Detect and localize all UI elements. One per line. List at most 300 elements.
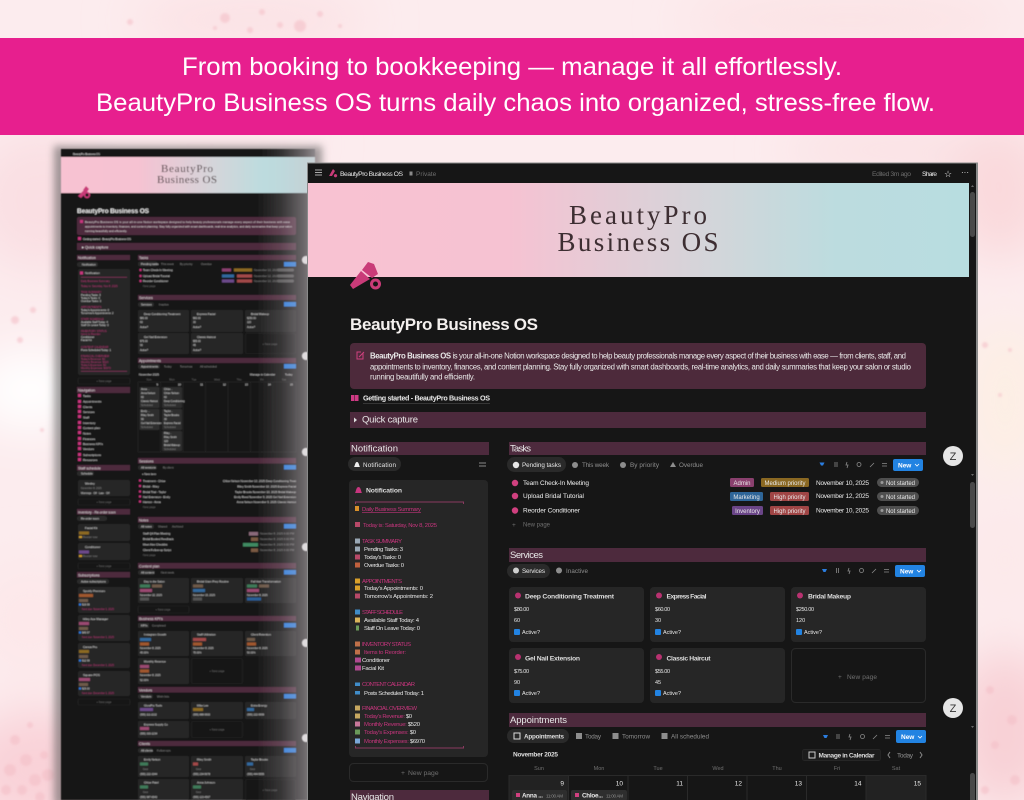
mini section: Tasks: [138, 255, 296, 288]
mini section: Services: Services: [141, 302, 152, 306]
mini navigation list: Subscriptions: [83, 453, 102, 457]
mini cover: [61, 157, 315, 193]
task rows: November 10, 2025: [816, 480, 869, 487]
scrollbars: [970, 185, 975, 800]
mini heading: Navigation: Navigation: [78, 388, 95, 392]
top bar: Share: [922, 171, 937, 178]
mini section: Notes: Archived: [172, 524, 183, 528]
mini cover: BeautyPro: [161, 163, 214, 175]
mini section: Tasks: Overdue: [201, 262, 212, 266]
notification card: [349, 480, 488, 757]
service card: Deep Conditioning Treatment: [509, 587, 644, 642]
task rows: High priority: [774, 495, 806, 501]
service card: Classic Haircut: $55.00: [655, 669, 670, 675]
mini panel: notification card: APPOINTMENTS: [81, 305, 102, 309]
toolbar: [820, 459, 923, 471]
notification card: Today is: Saturday, Nov 8, 2025: [363, 523, 438, 529]
mini navigation list: Content plan: [83, 426, 100, 430]
mini navigation list: Tasks: [83, 394, 91, 398]
task rows: Admin: [733, 481, 751, 487]
mini staff card: Schedule: [81, 472, 93, 476]
notification card: Available Staff Today: 4: [364, 618, 420, 624]
mini section: Tasks: November 10, 2025: [254, 279, 279, 283]
service card: Bridal Makeup: [791, 587, 926, 642]
mini icon: brush: [78, 186, 89, 198]
mini section: Appointments: Appointments: [139, 359, 161, 363]
new page card: [792, 648, 926, 702]
mini section: Tasks: New page: [143, 284, 156, 288]
event: Anna: [512, 790, 567, 800]
service card: Bridal Makeup: Bridal Makeup: [808, 594, 851, 600]
task rows: Team Check-In Meeting: [523, 480, 589, 487]
mini section: Services: Inactive: [159, 302, 169, 306]
mini section: Appointments: Riley Smith: [141, 414, 154, 417]
mini navigation list: Vendors: [83, 447, 95, 451]
notification card: Today's Expenses: $0: [364, 730, 417, 736]
mini staff card: + New page: [96, 500, 112, 504]
heading: Appointments: [509, 713, 926, 727]
mini heading: Inventory: Inventory - Re-order soon: [78, 510, 116, 514]
calendar weekdays: Wed: [712, 766, 724, 772]
mini panel: notification card: [78, 269, 130, 375]
tabs: Overdue: [679, 462, 703, 469]
mini section: Notes: Meet Alex Checklist: [143, 542, 168, 546]
mini subscription cards: Next due: December 1, 2025: [82, 692, 115, 695]
service card: Classic Haircut: Classic Haircut: [666, 656, 711, 662]
mini title: BeautyPro Business OS: [77, 208, 150, 215]
mini section: Sessions: [138, 458, 296, 509]
mini section: Clients: New: [143, 768, 148, 771]
mini heading: Inventory: [77, 509, 130, 514]
chat bubble 2: Z: [950, 703, 957, 715]
notification card: Daily Business Summary: [362, 507, 421, 513]
mini section: Content plan: [138, 563, 296, 613]
mini section: Appointments: Scheduled: [164, 404, 176, 407]
mini section: Vendors: Mike Lee: [197, 704, 209, 708]
mini section: Appointments: 12: [223, 382, 226, 386]
mini inventory cards: Reorder now: [83, 536, 98, 539]
mini navigation list: Notes: [83, 432, 91, 436]
mini panel: notification card: Monthly Revenue: $520: [81, 360, 109, 364]
mini staff card: Mornings · Off · Late · Off: [81, 492, 110, 495]
mini section: Vendors: Vendors: [139, 688, 152, 692]
mini section: Appointments: Anna Nelson: [141, 392, 156, 395]
mini section: Appointments: Mon: [169, 378, 175, 382]
mini section: Content plan: November 15, 2025: [193, 594, 216, 597]
toolbar: New: [900, 568, 914, 576]
mini section: Sessions: Taylor Brooks November 10, 2025 Bridal Makeup: [235, 490, 296, 494]
mini panel: notification card: Daily Business Summary: [81, 279, 111, 283]
mini subscription cards: Active subscriptions: [81, 580, 106, 584]
event: Chloe: [571, 790, 627, 800]
mini section: Clients: [138, 741, 296, 800]
mini section: Vendors: (555) 222-9999: [247, 714, 265, 716]
heading: Services: [509, 548, 926, 562]
mini section: Services: Active?: [193, 326, 202, 329]
mini section: Tasks: Reorder Conditioner: [143, 279, 168, 283]
task rows: Not started: [886, 495, 915, 501]
calendar grid: 14: [854, 780, 862, 788]
mini fade overlay: [258, 149, 315, 800]
mini panel: notification card: Today is: Saturday, Nov 8, 2025: [81, 284, 118, 288]
mini section: Services: [138, 295, 296, 354]
notification card: Today's Revenue: $0: [364, 714, 413, 720]
panel: Notification column: [348, 442, 489, 800]
mini navigation list: [78, 394, 103, 462]
mini section: Appointments: Sun: [147, 378, 152, 382]
mini subscription cards: Canva Pro: [83, 645, 98, 649]
task rows: New page: [523, 522, 551, 528]
service card: Classic Haircut: [650, 648, 785, 703]
mini navigation list: Inventory: [83, 421, 96, 425]
new page button: [350, 764, 488, 782]
banner line 2: BeautyPro Business OS turns daily chaos into organized, stress-free flow.: [96, 89, 935, 117]
mini section: Clients: New: [143, 791, 148, 794]
service card: Bridal Makeup: $250.00: [796, 607, 814, 613]
mini section: Tasks: November 10, 2025: [254, 268, 279, 272]
mini subscription cards: $19.99: [82, 604, 90, 606]
mini inventory cards: [77, 516, 130, 569]
calendar weekdays: Sat: [892, 766, 901, 772]
mini section: Clients: (555) 987-6543: [140, 796, 158, 799]
mini panel: notification card: Today's Expenses: $0: [81, 363, 107, 367]
mini panel: notification card: Today's Revenue: $0: [81, 357, 106, 361]
mini section: Vendors: Vendors: [141, 694, 152, 698]
mini new page: + New page: [96, 379, 112, 383]
notification card: STAFF SCHEDULE: [362, 610, 403, 616]
mini section: Appointments: Thu: [237, 378, 242, 382]
calendar grid: [509, 775, 926, 800]
heading: Appointments: Appointments: [510, 715, 567, 726]
mini panel: notification card: INVENTORY STATUS: [81, 329, 107, 333]
service card: Deep Conditioning Treatment: $80.00: [514, 607, 529, 613]
chat bubble 1: [943, 446, 963, 466]
mini section: Notes: November 8, 2025 6:00 PM: [260, 537, 295, 541]
tabs: Today: [585, 734, 602, 740]
mini section: Business KPIs: November 8, 2025: [140, 647, 161, 650]
mini section: Services: $55.00: [193, 340, 201, 343]
mini section: Content plan: Fall Hair Transformation: [251, 580, 281, 584]
calendar grid: 15: [914, 780, 921, 788]
mini navigation list: Services: [83, 410, 95, 414]
mini section: Vendors: GlowPro Tools: [144, 704, 163, 708]
mini section: Sessions: Haircut - Anna: [143, 500, 161, 504]
mini section: Clients: New: [196, 768, 201, 771]
mini heading: Notification: Notification: [78, 256, 96, 260]
task rows: Medium priority: [764, 481, 806, 487]
task rows: Marketing: [733, 495, 760, 501]
mini section: Appointments: Riley Smith: [164, 436, 177, 439]
mini section: Appointments: Tue: [192, 378, 197, 382]
new page button: New page: [408, 770, 439, 777]
tabs: Pending tasks: [522, 462, 561, 469]
mini subscription cards: $12.99: [82, 660, 90, 662]
notification card: Items to Reorder:: [364, 650, 406, 656]
mini callout: BeautyPro Business OS is your all-in-one Notion workspace designed to help beauty professionals manage every aspect of their business with ease: [85, 220, 290, 224]
calendar weekdays: Mon: [594, 766, 604, 772]
mini section: Business KPIs: November 8, 2025: [140, 674, 161, 677]
notification card: APPOINTMENTS: [362, 579, 402, 585]
mini section: Clients: Chloe Patel: [144, 780, 159, 784]
notification card: Tomorrow's Appointments: 2: [364, 594, 433, 600]
mini section: Tasks: Tasks: [139, 256, 148, 260]
mini section: Sessions: By client: [163, 466, 174, 470]
new page card: +: [838, 674, 842, 681]
tabs: This week: [582, 462, 610, 469]
mini panel: notification card: Staff On Leave Today: 0: [81, 323, 109, 327]
mini section: Services: Express Facial: [197, 312, 216, 316]
icon: edit: [357, 352, 364, 359]
mini section: Tasks: Pending tasks: [141, 262, 159, 266]
heading: Services: Services: [510, 550, 543, 561]
event: Anna: Anna ...: [522, 792, 543, 800]
service card: Gel Nail Extension: $75.00: [514, 669, 529, 675]
calendar weekdays: [534, 766, 901, 772]
mini section: Appointments: Wed: [214, 378, 220, 382]
mini section: Clients: (555) 234-5678: [193, 773, 211, 776]
mini navigation list: Business KPI's: [83, 442, 103, 446]
notification card: Pending Tasks: 3: [364, 547, 404, 553]
task rows: November 12, 2025: [816, 493, 869, 500]
mini section: Services: 90: [140, 344, 143, 347]
mini section: Services: Classic Haircut: [197, 335, 216, 339]
mini section: Appointments: Scheduled: [141, 426, 153, 429]
mini section: Appointments: Taylor...: [164, 410, 173, 413]
mini section: Services: Services: [139, 296, 153, 300]
mini section: Appointments: Chloe...: [164, 388, 173, 391]
calendar grid: 9: [560, 780, 564, 788]
calendar grid: 13: [795, 780, 802, 788]
mini section: Notes: November 8, 2025 6:00 PM: [260, 548, 295, 552]
mini tab: Notification: [77, 262, 98, 267]
cover: [308, 183, 969, 277]
service card: Express Facial: $60.00: [655, 607, 670, 613]
service card: Bridal Makeup: 120: [796, 618, 805, 624]
tabs: By priority: [630, 462, 660, 469]
tabs: [507, 564, 588, 578]
calendar weekdays: Sun: [534, 766, 544, 772]
mini staff card: Wesley: [85, 482, 95, 486]
mini section: Vendors: (555) 333-1234: [140, 732, 158, 736]
mini section: Content plan: November 8, 2025: [247, 594, 268, 597]
mini panel: notification card: TASK SUMMARY: [81, 290, 102, 294]
service card: Deep Conditioning Treatment: Deep Conditioning Treatment: [525, 594, 615, 600]
mini callout: running beautifully and efficiently.: [85, 229, 127, 233]
mini section: Business KPIs: Monthly Revenue: [144, 660, 166, 664]
mini section: Business KPIs: 50.00%: [247, 652, 256, 654]
mini section: Business KPIs: 75.00%: [193, 652, 202, 654]
mini panel: notification card: Notification: [85, 271, 100, 275]
mini inventory cards: + New page: [96, 564, 112, 568]
tabs: Tomorrow: [622, 734, 650, 740]
mini quick capture: [77, 243, 296, 250]
mini panel: notification card: Conditioner: [81, 335, 94, 339]
task rows: [512, 478, 919, 529]
notification card: Posts Scheduled Today: 1: [364, 691, 424, 697]
mini section: Services: Active?: [247, 326, 256, 329]
mini panel: notification card: Tomorrow's Appointments: 2: [81, 311, 114, 315]
mini section: Appointments: Today: [285, 372, 293, 376]
calendar grid: 10: [616, 780, 623, 788]
mini section: Clients: Clients: [139, 742, 150, 746]
mini panel: notification card: Items to Reorder:: [81, 332, 101, 336]
mini section: Appointments: All scheduled: [200, 364, 217, 368]
mini cover: Business OS: [157, 174, 217, 186]
service card: Classic Haircut: 45: [655, 680, 661, 686]
mini section: Appointments: Gel Nail Extension: [141, 422, 162, 425]
top bar: ···: [961, 168, 969, 177]
mini section: Vendors: + New page: [209, 728, 225, 732]
tabs: [507, 457, 703, 472]
mini new page: [78, 378, 130, 384]
mini section: Services: Deep Conditioning Treatment: [144, 312, 181, 316]
mini section: Content plan: Content plan: [139, 564, 159, 568]
mini section: Appointments: 30: [164, 418, 167, 421]
mini panel: notification card: Available Staff Today: 4: [81, 320, 109, 324]
mini subscription cards: Hiley Ace Manager: [83, 617, 108, 621]
mini section: Sessions: Emily Reed November 9, 2025 Gel Nail Extension: [234, 495, 296, 499]
mini section: Business KPIs: November 8, 2025: [247, 647, 268, 650]
mini section: Tasks: By priority: [180, 262, 193, 266]
task rows: +: [512, 522, 516, 529]
mini section: Notes: Notes: [139, 518, 149, 522]
mini section: Sessions: New page: [143, 505, 156, 509]
service card: Bridal Makeup: Active?: [804, 630, 822, 636]
callout: [350, 343, 926, 389]
mini section: Appointments: Sat: [282, 378, 286, 382]
mini section: Notes: New page: [143, 553, 156, 557]
mini section: Sessions: Bridal - Riley: [143, 484, 159, 488]
event: Chloe: 11:00 AM: [606, 794, 623, 798]
top bar: BeautyPro Business OS: [340, 171, 403, 178]
tabs: Inactive: [566, 568, 588, 575]
mini section: Clients: Riley Smith: [197, 758, 212, 762]
mini section: Appointments: Appointments: [141, 364, 159, 368]
mini section: Services: $60.00: [193, 317, 201, 320]
callout: BeautyPro Business OS is your all-in-one Notion workspace designed to help beauty professionals manage every aspect of their business with ease — from clients, staff, and: [370, 352, 906, 360]
mini section: Clients: Emily Nelson: [144, 758, 161, 762]
callout: running beautifully and efficiently.: [370, 372, 475, 382]
mini section: Content plan: Day in the Salon: [144, 580, 165, 584]
mini section: Appointments: Bridal Makeup: [164, 444, 181, 447]
mini section: Notes: November 8, 2025 6:00 PM: [260, 532, 295, 536]
mini navigation list: Resources: [83, 458, 98, 462]
mini section: Sessions: + New item: [142, 472, 157, 476]
toolbar: [823, 730, 926, 743]
mini section: Appointments: 10: [178, 382, 181, 386]
top bar: [308, 164, 976, 183]
calendar grid: 11: [676, 780, 683, 788]
task rows: Upload Bridal Tutorial: [523, 493, 585, 500]
service card: Gel Nail Extension: Gel Nail Extension: [525, 656, 580, 662]
tab: Notification: Notification: [363, 462, 396, 469]
mini section: Appointments: 90: [141, 418, 144, 421]
mini panel: notification card: Facial Kit: [81, 338, 92, 342]
mini section: Appointments: Classic Haircut: [141, 400, 158, 403]
task rows: November 10, 2025: [816, 508, 869, 514]
mini subscription cards: Next due: November 1, 2025: [82, 636, 115, 639]
banner line 1: From booking to bookkeeping — manage it all effortlessly.: [182, 53, 842, 81]
mini panel: notification card: STAFF SCHEDULE: [81, 317, 104, 321]
task rows: Reorder Conditioner: [523, 508, 581, 514]
mini section: Services: $75.00: [140, 340, 148, 343]
mini section: Tasks: This week: [161, 262, 174, 266]
notification card: Staff On Leave Today: 0: [364, 626, 421, 632]
mini section: Notes: Staff Q4 Plan Meeting: [143, 532, 171, 536]
shadow behind left screenshot: [54, 146, 322, 800]
mini section: Appointments: 60: [141, 396, 144, 399]
mini section: Business KPIs: Staff Utilization: [197, 632, 216, 636]
service card: Classic Haircut: Active?: [663, 691, 681, 697]
mini right column: [138, 255, 296, 800]
task rows: Not started: [886, 509, 915, 515]
notification card: Facial Kit: [362, 666, 384, 672]
mini inventory cards: Re-order soon: [81, 516, 99, 520]
service card: Express Facial: [650, 587, 785, 642]
mini callout: appointments to inventory, finances, and content planning. Stay fully organized with smart dashboards, real-time analytics, and daily summaries that keep your salon: [85, 224, 292, 228]
mini section: Vendors: [138, 687, 296, 738]
mini section: Appointments: Scheduled: [164, 448, 176, 451]
mini section: Services: 45: [193, 344, 196, 347]
mini section: Appointments: [138, 358, 296, 452]
calendar header: [513, 750, 922, 760]
panel: left screenshot of full workspace: [61, 149, 315, 800]
mini inventory cards: Reorder now: [83, 555, 98, 558]
mini section: Business KPIs: November 8, 2025: [193, 647, 214, 650]
mini panel: notification card: Pending Tasks: 3: [81, 293, 101, 297]
toolbar: New: [901, 734, 915, 741]
mini section: Business KPIs: Instagram Growth: [144, 632, 167, 636]
icon: menu: [315, 170, 322, 175]
notification card: Monthly Expenses: $6970: [364, 739, 426, 745]
mini section: Vendors: Extra Energy: [251, 704, 268, 708]
tabs: Appointments: [524, 734, 564, 740]
mini section: Content plan: + New page: [155, 608, 171, 612]
mini section: Appointments: 15: [290, 382, 293, 386]
mini tab: Notification: Notification: [82, 262, 96, 266]
mini heading: Subscriptions: Subscriptions: [78, 574, 100, 578]
task rows: High priority: [774, 509, 806, 515]
mini section: Notes: November 8, 2025 6:00 PM: [260, 542, 295, 546]
heading: Navigation: [350, 790, 489, 800]
mini section: Appointments: 120: [164, 440, 169, 443]
mini section: Notes: Bridal Booked Feedback: [143, 537, 174, 541]
mini section: Appointments: Express Facial: [164, 422, 181, 425]
mini section: Notes: [138, 517, 296, 557]
mini section: Sessions: All sessions: [141, 466, 156, 470]
top bar: Edited 3m ago: [872, 171, 911, 178]
mini section: Clients: (555) 123-4567: [193, 796, 211, 799]
mini section: Services: Active?: [140, 349, 149, 352]
mini section: Content plan: November 22, 2025: [140, 594, 163, 597]
mini section: Business KPIs: Business KPI's: [139, 617, 163, 621]
mini section: Services: $250.00: [247, 317, 257, 320]
mini section: Notes: Shared: [158, 524, 167, 528]
mini section: Content plan: Bridal Glam Prep Routine: [197, 580, 229, 584]
chat bubble 1: Z: [950, 451, 957, 463]
mini panel: notification card: Posts Scheduled Today: 1: [81, 348, 112, 352]
mini section: Appointments: 60: [164, 396, 167, 399]
mini section: Services: 60: [140, 321, 143, 324]
mini section: Appointments: Taylor Brooks: [164, 414, 180, 417]
banner: [0, 38, 1024, 135]
icon: workspace logo: [329, 169, 337, 177]
mini panel: notification card: CONTENT CALENDAR: [81, 345, 108, 349]
mini section: Clients: New: [250, 768, 255, 771]
mini section: Tasks: Team Check-In Meeting: [143, 268, 173, 272]
getting started link: Getting started - BeautyPro Business OS: [363, 394, 490, 402]
tabs: All scheduled: [671, 734, 709, 740]
